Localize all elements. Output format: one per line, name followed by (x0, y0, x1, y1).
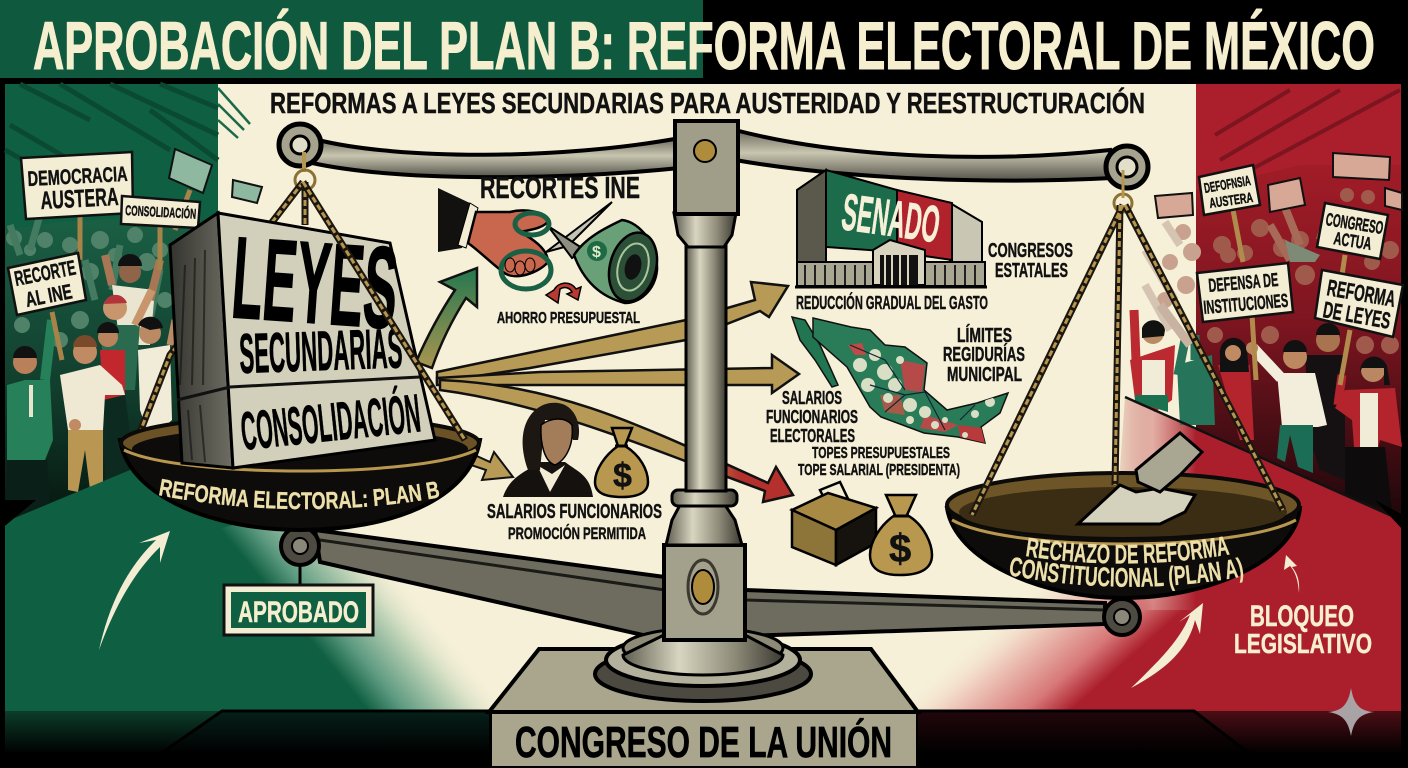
icon: money bag 2 (870, 495, 932, 575)
sign: blank top right (1333, 153, 1390, 180)
sign: democracia austera: DEMOCRACIA (27, 163, 128, 191)
pan label line 2: CONSTITUCIONAL (PLAN A) (1010, 557, 1244, 591)
right ring (1106, 146, 1148, 188)
protester: woman in red cap (100, 290, 152, 390)
pan label line 1: RECHAZO DE REFORMA (1026, 536, 1230, 564)
balance top beam (279, 121, 1148, 214)
capital bolt (694, 140, 716, 162)
shaft (686, 245, 726, 491)
label: bloqueo legislativo: BLOQUEO (1250, 600, 1354, 633)
label: límites regidurías municipal: MUNICIPAL (947, 364, 1022, 386)
label: reducción gradual: REDUCCIÓN GRADUAL DEL GASTO (796, 292, 988, 313)
icon: woman official (503, 403, 593, 497)
icon: scissors (501, 202, 612, 289)
infographic canvas: SECUNDARIAS (238, 316, 403, 385)
protester: woman in red jacket (1130, 310, 1175, 412)
protester: man in green (5, 320, 53, 522)
icon: shirt cuff (458, 203, 478, 248)
sign: red half (897, 190, 952, 260)
arrow: green to recortes INE (416, 268, 477, 368)
arrow: cream up-left (99, 531, 170, 650)
right crowd: red opposition (1130, 153, 1403, 520)
sign: green half (826, 170, 897, 252)
sign: blank (169, 149, 212, 193)
left crowd: green supporters (5, 149, 262, 522)
sign: defofnsia austera: AUSTERA (1208, 189, 1254, 211)
label: recortes ine: RECORTES INE (480, 170, 640, 205)
protester: man in green suit (1160, 305, 1215, 425)
plaque: congreso de la unión: CONGRESO DE LA UNIÓN (515, 717, 892, 767)
label: bloqueo legislativo (1234, 600, 1372, 659)
map of Mexico (792, 317, 1008, 443)
pan label: REFORMA ELECTORAL: PLAN B (159, 478, 440, 510)
label: salarios funcionarios electorales: ELECTORALES (770, 426, 855, 446)
label: congresos estatales: CONGRESOS (988, 240, 1073, 262)
arrow: gold to senado (437, 282, 788, 382)
arrow: small gold to salaries (462, 452, 513, 480)
sign: defofnsia austera (1199, 165, 1260, 215)
sign: reforma de leyes (1315, 270, 1403, 337)
sign: recorte al ine (8, 253, 86, 315)
pedestal (489, 649, 918, 712)
icon: money bag: $ (613, 457, 632, 495)
left chains behind block (135, 152, 315, 445)
sign poles (1233, 210, 1350, 385)
label: topes (798, 445, 960, 479)
icon: ballot box (792, 482, 876, 565)
left ring (279, 124, 321, 166)
label: salarios funcionarios electorales: SALARIOS (782, 388, 842, 408)
broken stone (1078, 433, 1202, 524)
sign: defensa de instituciones: DEFENSA DE (1208, 270, 1279, 297)
sign: congreso actua: ACTUA (1332, 228, 1373, 254)
label: salarios funcionarios electorales: FUNCIONARIOS (766, 407, 858, 427)
icon: small red curved arrow (546, 283, 581, 303)
label: salarios funcionarios: SALARIOS FUNCIONARIOS (487, 501, 662, 523)
left chain over block (303, 182, 465, 440)
icon: sleeve (438, 188, 474, 252)
sign: democracia austera: AUSTERA (40, 183, 119, 215)
sign: defofnsia austera: DEFOFNSIA (1203, 172, 1252, 196)
protester: man in white sweater (1246, 340, 1327, 473)
icon: hand (468, 210, 549, 276)
arrow: cream up-right (1131, 603, 1203, 688)
sign poles (52, 190, 190, 360)
sign: recorte al ine: AL INE (24, 280, 74, 312)
sign: recorte al ine: RECORTE (13, 257, 78, 291)
arrow: cream small (1284, 555, 1299, 593)
sign: blank middle (1268, 178, 1305, 212)
plaque: congreso de la unión (491, 713, 917, 767)
floor shapes below the crowds (0, 397, 1403, 530)
sign: congreso actua (1317, 203, 1388, 259)
right pivot (1104, 599, 1140, 635)
label: promoción permitida: PROMOCIÓN PERMITIDA (508, 524, 646, 543)
protester: back man in white (105, 254, 160, 345)
left pan (118, 421, 482, 532)
stone block: leyes secundarias: LEYES (228, 212, 402, 353)
icon: money bag (595, 428, 648, 497)
collar lower (666, 505, 742, 545)
lower housing (664, 545, 745, 640)
protester: man in white shirt (60, 335, 125, 492)
label: topes: TOPE SALARIAL (PRESIDENTA) (798, 462, 960, 479)
senado building group: SENADO (838, 183, 943, 255)
protester: woman in white (138, 317, 175, 440)
sign: democracia austera (21, 152, 133, 219)
recortes INE group (438, 170, 664, 327)
sign: defensa de instituciones (1197, 263, 1293, 322)
senado building group (795, 170, 988, 313)
central column (489, 213, 918, 712)
sign: consolidación (121, 196, 200, 228)
capital (675, 121, 738, 214)
column foot (595, 628, 811, 701)
label: límites regidurías municipal: LÍMITES (957, 324, 1012, 347)
sign: consolidación: CONSOLIDACIÓN (125, 201, 197, 222)
left pivot (281, 527, 319, 565)
sign: small blank (232, 180, 262, 203)
building base and portico (795, 240, 987, 287)
subtitle: REFORMAS A LEYES SECUNDARIAS PARA AUSTERIDAD Y REESTRUCTURACIÓN (270, 86, 1145, 120)
label: límites regidurías municipal (943, 324, 1025, 386)
sign: defensa de instituciones: INSTITUCIONES (1203, 291, 1289, 319)
label: salarios funcionarios electorales (766, 388, 858, 446)
building right wing (950, 203, 982, 268)
icon: money bag 2: $ (889, 527, 911, 571)
label: congresos estatales (988, 240, 1073, 282)
label: límites regidurías municipal: REGIDURÍAS (943, 343, 1025, 366)
arrow: gold to red ballot box (440, 380, 793, 502)
icon: money roll: $ (592, 244, 601, 261)
salarios funcionarios group (487, 403, 662, 543)
protester: woman at right (1335, 357, 1402, 512)
sign: blank edge (1385, 188, 1402, 210)
protester: woman in red (97, 322, 135, 490)
arrow: gold to salaries (437, 355, 799, 393)
building left wing (797, 170, 826, 262)
label: ahorro presupuestal: AHORRO PRESUPUESTAL (497, 310, 640, 327)
right pan (944, 431, 1302, 600)
aprobado text: APROBADO (238, 596, 359, 629)
infographic canvas: CONSOLIDACIÓN (238, 383, 423, 462)
protester: dark suit man (1305, 323, 1345, 480)
connector and aprobado tag (224, 565, 373, 635)
title band (0, 0, 1408, 84)
icon: sparkle mark (1328, 688, 1374, 736)
protester: woman in red dress (1218, 338, 1254, 440)
icon: money roll (574, 220, 664, 307)
balance lower beam (281, 527, 1140, 640)
right chains (972, 170, 1283, 515)
label: congresos estatales: ESTATALES (995, 260, 1068, 282)
label: topes: TOPES PRESUPUESTALES (812, 445, 950, 462)
sign: blank left (1155, 193, 1193, 218)
stone block: leyes secundarias (170, 212, 435, 468)
lower bolt (688, 560, 718, 614)
collar upper (674, 213, 736, 247)
